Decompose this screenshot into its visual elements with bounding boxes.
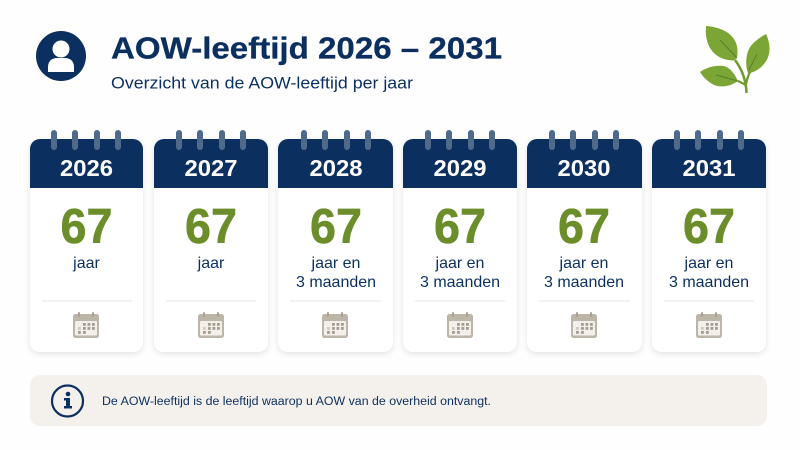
unit: jaar (197, 255, 225, 272)
unit: jaar en (311, 255, 360, 272)
age: 67 (60, 200, 112, 254)
unit: jaar en (435, 255, 484, 272)
age: 67 (434, 200, 486, 254)
panel: 2031 card (652, 130, 766, 352)
panel: 2029 card (403, 130, 517, 352)
note text: De AOW-leeftijd is de leeftijd waarop u AOW van de overheid ontvangt. (102, 396, 491, 408)
year: 2028 (310, 155, 363, 181)
months: 3 maanden (420, 274, 500, 291)
icon: calendar (571, 312, 597, 338)
age: 67 (683, 200, 735, 254)
icon: info (52, 386, 83, 416)
year: 2030 (558, 155, 610, 181)
months: 3 maanden (669, 274, 749, 291)
icon: green leaves (700, 26, 770, 93)
title: AOW-leeftijd 2026 – 2031 (111, 30, 502, 66)
panel: info note (30, 375, 767, 426)
age: 67 (558, 200, 610, 254)
age: 67 (185, 200, 237, 254)
months: 3 maanden (544, 274, 624, 291)
unit: jaar (72, 255, 101, 272)
icon: calendar (73, 312, 99, 338)
panel: 2026 card (30, 130, 143, 352)
panel: 2030 card (527, 130, 642, 352)
year: 2031 (682, 155, 736, 181)
panel: 2028 card (278, 130, 393, 352)
year: 2029 (434, 155, 486, 181)
age: 67 (310, 200, 362, 254)
year: 2026 (60, 155, 113, 181)
icon: calendar (447, 312, 473, 338)
icon: calendar (198, 312, 224, 338)
icon: calendar (696, 312, 722, 338)
panel: 2027 card (154, 130, 268, 352)
unit: jaar en (559, 255, 608, 272)
subtitle: Overzicht van de AOW-leeftijd per jaar (111, 74, 414, 92)
year: 2027 (184, 155, 238, 181)
unit: jaar en (684, 255, 733, 272)
months: 3 maanden (296, 274, 376, 291)
icon: person badge (36, 31, 86, 81)
icon: calendar (322, 312, 348, 338)
